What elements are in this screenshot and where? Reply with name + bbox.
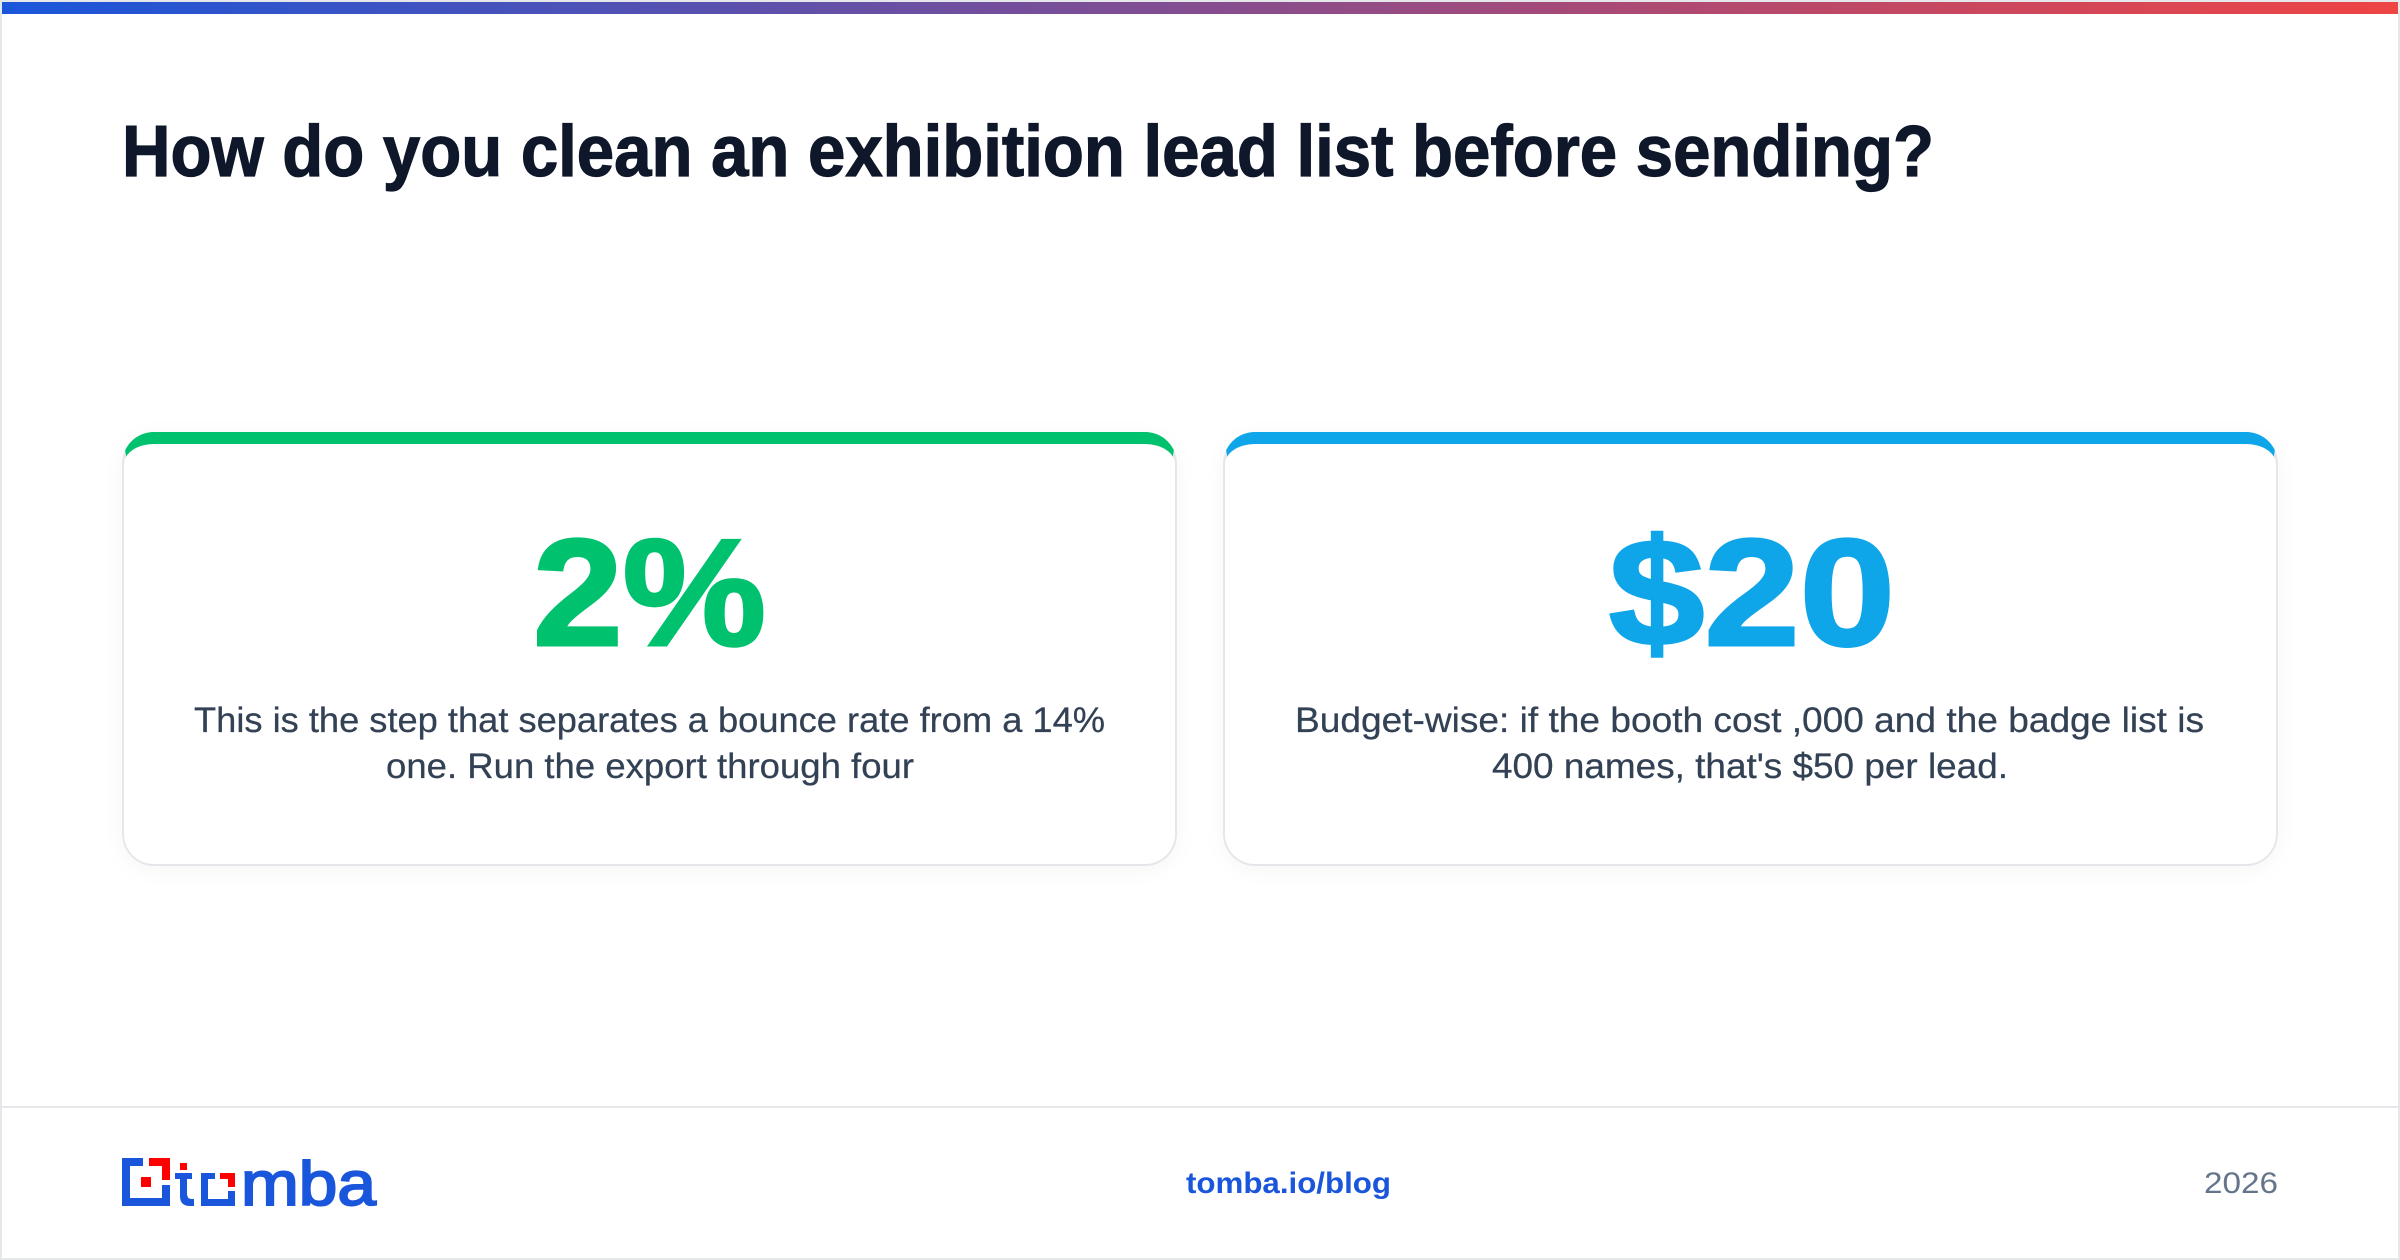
logo: tomba: mba	[241, 1150, 377, 1219]
panel: 2% stat card	[122, 432, 1177, 866]
title: How do you clean an exhibition lead list before sending?	[122, 112, 1934, 192]
top gradient bar	[2, 2, 2398, 14]
stat: 2%: 2%	[533, 508, 766, 678]
description: budget per lead: 400 names, that's $50 per lead.	[1492, 747, 2008, 786]
description: budget per lead: Budget-wise: if the booth cost ,000 and the badge list is	[1295, 701, 2204, 740]
panel: $20 stat card	[1223, 432, 2278, 866]
description: bounce rate step: one. Run the export through four	[386, 747, 914, 786]
description: bounce rate step	[194, 701, 1105, 786]
stat: $20: $20	[1609, 508, 1895, 678]
footer year: 2026	[2204, 1167, 2278, 1200]
description: budget per lead	[1295, 701, 2204, 786]
footer	[2, 1106, 2398, 1258]
footer link: tomba.io/blog	[1186, 1167, 1391, 1200]
logo: tomba	[122, 1150, 378, 1219]
description: bounce rate step: This is the step that separates a bounce rate from a 14%	[194, 701, 1105, 740]
